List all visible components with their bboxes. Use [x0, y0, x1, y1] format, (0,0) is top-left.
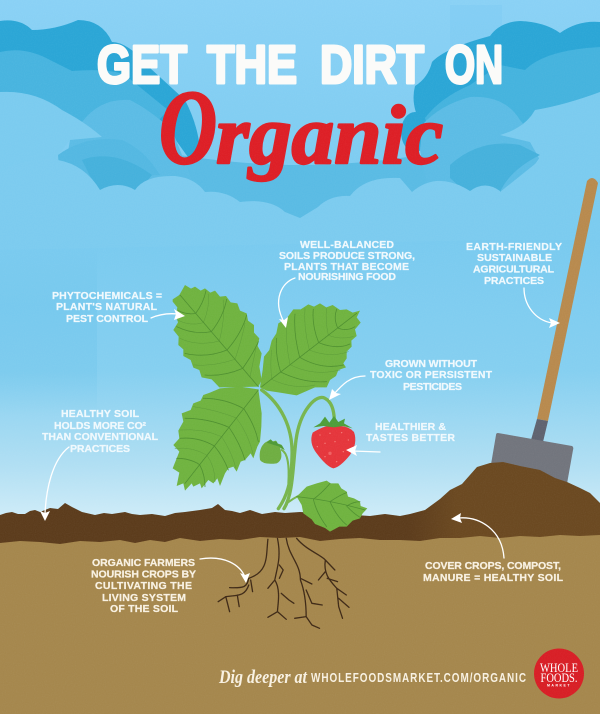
callout: earth-friendly: [466, 241, 562, 287]
cloud: band under Organic: [150, 150, 450, 235]
callout: grown without pesticides: PESTICIDES: [403, 381, 462, 393]
arrow: to roots: [200, 558, 250, 583]
cloud: right second layer: [425, 47, 600, 135]
leaf: lower left: [173, 387, 262, 491]
cloud: right inner dark: [450, 144, 540, 196]
callout: organic farmers: ORGANIC FARMERS: [92, 557, 195, 569]
callout: well-balanced soils: NOURISHING FOOD: [298, 271, 396, 283]
cloud: left pale layer: [0, 92, 102, 180]
callout: organic farmers: NOURISH CROPS BY: [91, 568, 196, 580]
callout: earth-friendly: EARTH-FRIENDLY: [466, 241, 562, 253]
plant: [173, 285, 367, 532]
soil band and mound: [0, 462, 600, 544]
callout: earth-friendly: SUSTAINABLE: [477, 252, 552, 264]
title: Organic: rganic: [216, 89, 443, 182]
title: GET THE DIRT ON: THE: [207, 35, 297, 95]
callout: healthy soil holds CO2: PRACTICES: [70, 443, 130, 455]
callout: healthy soil holds CO2: HOLDS MORE CO²: [54, 420, 146, 432]
callout: healthy soil holds CO2: THAN CONVENTIONAL: [42, 431, 159, 443]
callout: organic farmers: LIVING SYSTEM: [102, 592, 186, 604]
callout: phytochemicals: [52, 290, 162, 325]
panel: ground: [0, 525, 600, 714]
leaf: bottom: [297, 481, 367, 532]
arrow: to mound: [451, 513, 504, 558]
strawberry: [311, 416, 355, 468]
arrow: to upper left leaf: [151, 309, 185, 320]
panel: sky background: [0, 0, 600, 530]
shovel neck: [531, 419, 548, 442]
callout: organic farmers: CULTIVATING THE: [95, 580, 192, 592]
callout: well-balanced soils: SOILS PRODUCE STRONG,: [279, 250, 415, 262]
clouds: [0, 20, 600, 250]
cloud: left inner dark: [82, 156, 152, 196]
logo: Whole Foods Market: [534, 648, 584, 698]
callout: healthier and tastes better: [366, 421, 455, 444]
callout: healthier and tastes better: TASTES BETTER: [366, 432, 455, 444]
callout: grown without pesticides: TOXIC OR PERSISTENT: [370, 369, 493, 381]
callout: grown without pesticides: [370, 358, 493, 393]
arrow: to shovel handle: [524, 288, 560, 328]
cloud: right dark blob by the final letter: [401, 112, 429, 152]
callout: healthier and tastes better: HEALTHIER &: [375, 421, 446, 433]
logo: Whole Foods Market: FOODS.: [540, 671, 578, 685]
callout: well-balanced soils: [279, 239, 415, 283]
cloud: top right dark layer: [414, 21, 600, 126]
callout: grown without pesticides: GROWN WITHOUT: [385, 358, 478, 370]
shovel handle: [537, 178, 598, 421]
cloud: left second layer: [0, 50, 168, 130]
callout: earth-friendly: AGRICULTURAL: [473, 264, 555, 276]
arrow: to strawberry: [346, 445, 380, 456]
callout: cover crops: MANURE = HEALTHY SOIL: [423, 572, 564, 584]
callout: well-balanced soils: PLANTS THAT BECOME: [284, 261, 409, 273]
callout: cover crops: COVER CROPS, COMPOST,: [425, 560, 561, 572]
title: GET THE DIRT ON: ON: [445, 35, 503, 95]
callout: phytochemicals: PHYTOCHEMICALS =: [52, 290, 162, 302]
cloud: left inset: [58, 139, 160, 180]
logo: Whole Foods Market: MARKET: [547, 684, 571, 688]
footer: dig deeper link: Dig deeper at: [218, 667, 308, 688]
callout: cover crops: [423, 560, 564, 584]
shovel: [488, 178, 598, 495]
callout: organic farmers: OF THE SOIL: [110, 603, 179, 615]
unripe green berry: [260, 439, 285, 464]
callout: phytochemicals: PEST CONTROL: [66, 313, 149, 325]
cloud: right mid layer: [420, 97, 545, 200]
cloud: top left dark layer: [0, 20, 200, 160]
callout: well-balanced soils: WELL-BALANCED: [300, 239, 394, 251]
callout: organic farmers: [91, 557, 196, 615]
cloud: left mid layer: [60, 100, 200, 200]
title: GET THE DIRT ON: DIRT: [320, 35, 424, 95]
arrow: to berry stem: [329, 376, 365, 400]
shovel blade: [488, 433, 573, 495]
cloud: right pale layer: [500, 92, 600, 240]
callout: healthy soil holds CO2: HEALTHY SOIL: [61, 408, 140, 420]
arrow: to soil band: [40, 447, 69, 521]
footer: dig deeper link: [218, 667, 527, 688]
title: Organic: O: [159, 69, 217, 186]
cloud: light foreground bank: [0, 159, 500, 250]
arrow: to upper right leaf: [279, 278, 295, 328]
leaf: upper left: [173, 285, 262, 387]
roots: [218, 538, 349, 628]
footer: dig deeper link: WHOLEFOODSMARKET.COM/ORGANIC: [311, 671, 527, 685]
callout: healthy soil holds CO2: [42, 408, 159, 455]
leaf: upper right: [260, 303, 361, 395]
stems: [262, 390, 334, 509]
title: GET THE DIRT ON: GET: [97, 35, 187, 95]
callout: phytochemicals: PLANT'S NATURAL: [56, 301, 158, 313]
logo: Whole Foods Market: WHOLE: [540, 661, 578, 675]
callout: earth-friendly: PRACTICES: [484, 275, 544, 287]
